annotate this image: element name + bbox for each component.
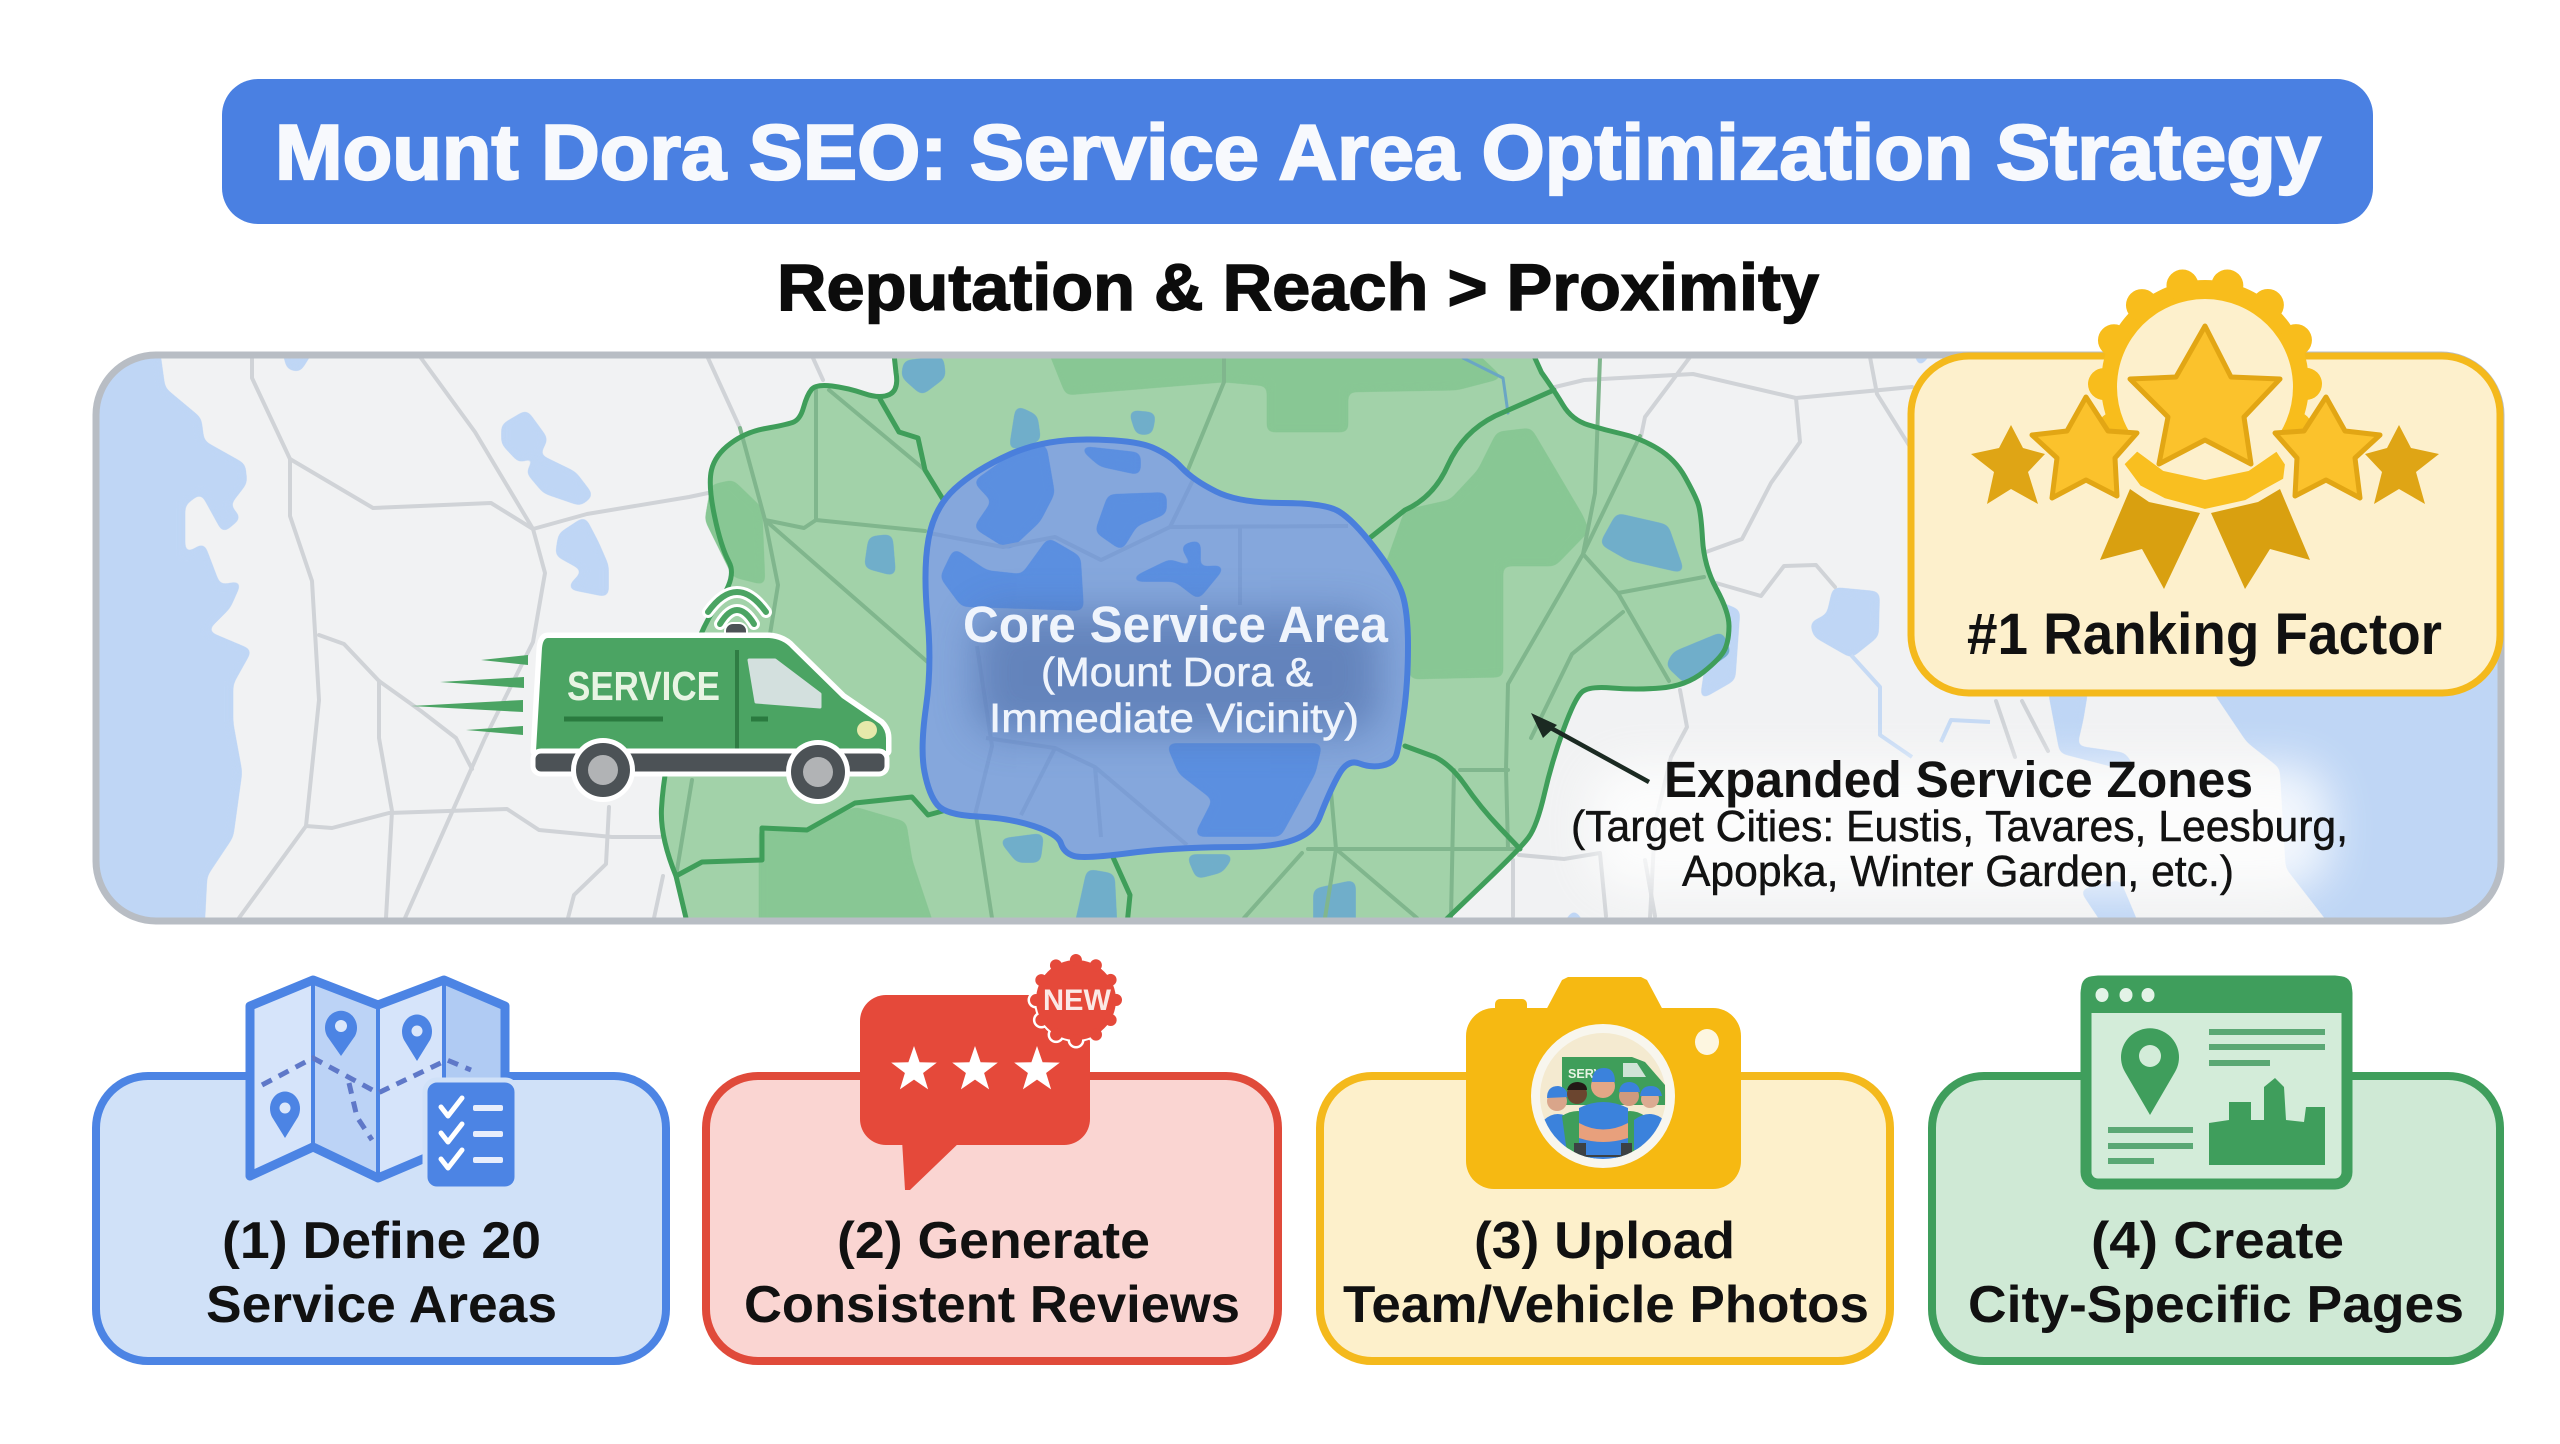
team photo [1544,1057,1665,1160]
green zone lakes [867,359,1728,935]
team members [1544,1068,1664,1160]
title text: Mount Dora SEO: Service Area Optimization Strategy [275,108,2321,196]
map: label halo [1590,765,2330,890]
map: roads [239,357,2048,918]
core area label: Core Service Area [963,596,1389,653]
core area label: (Mount Dora & [1041,649,1313,695]
step 2 label [744,1212,1240,1334]
subtitle: Reputation & Reach > Proximity [777,250,1819,324]
wifi signal [708,592,766,624]
panel: step 1 define service areas [96,980,666,1361]
core roads [929,480,1348,845]
icon: browser window with city page [2081,976,2352,1184]
new badge [1034,958,1118,1042]
step 3 label: Team/Vehicle Photos [1343,1276,1869,1334]
right star [2275,397,2380,498]
map: expanded zones label: Apopka, Winter Garden, etc.) [1682,847,2234,896]
core area label [963,596,1389,741]
icon: review speech bubble [860,958,1118,1190]
far left star [1971,425,2045,504]
van label: SERVICE [567,663,720,709]
left star [2032,397,2137,498]
map: expanded zones label: (Target Cities: Eustis, Tavares, Leesburg, [1571,802,2348,851]
map: core service area [923,439,1408,857]
ribbon tails [2100,489,2200,589]
core lakes [943,447,1319,834]
van bumper [533,751,887,774]
step 2 label: Consistent Reviews [744,1276,1240,1334]
ribbon arc [2122,449,2287,511]
darker green land [705,345,1589,935]
speed lines [411,655,528,735]
new badge: NEW [1043,984,1112,1017]
title banner [222,79,2373,224]
van window [749,660,820,707]
green zone boundaries [661,345,1729,935]
far right star [2365,425,2439,504]
photo van [1562,1057,1665,1105]
map: arrow to expanded zones [1531,713,1649,782]
panel: step 3 upload photos [1320,977,1890,1361]
panel: service area map [80,345,2520,935]
step 3 label [1343,1212,1869,1334]
step 1 label: Service Areas [206,1276,557,1334]
green zone roads [676,358,1704,918]
map: expanded zones label [1571,751,2348,896]
core label shade [975,612,1380,734]
map: coastal water [80,345,2520,935]
panel: #1 ranking factor [1911,280,2500,693]
checklist [425,1080,517,1189]
centre star [2130,326,2280,464]
text lines [2108,1029,2325,1164]
van body [536,638,886,751]
location pin [2121,1028,2179,1115]
map pins [270,1011,432,1138]
dashed routes [262,1058,471,1140]
step 4 label [1968,1212,2464,1334]
step 4 label: City-Specific Pages [1968,1276,2464,1334]
map: expanded service zones [661,345,1729,935]
team photo: SERV [1568,1066,1602,1081]
panel: step 4 city-specific pages [1932,976,2500,1361]
panel: step 2 generate reviews [706,958,1278,1361]
icon: rosette with stars [1971,280,2439,589]
icon: folded map with checklist [250,980,517,1189]
icon: camera with team photo [1466,977,1741,1189]
map: expanded zones label: Expanded Service Zones [1664,751,2253,808]
step 4 label: (4) Create [2091,1212,2344,1270]
van wheels [571,738,635,802]
map: rivers [1851,655,1990,757]
icon: service van [411,592,887,804]
city skyline [2209,1078,2325,1165]
step 2 label: (2) Generate [837,1212,1150,1270]
ranking label: #1 Ranking Factor [1967,602,2442,667]
review stars [891,1046,1060,1089]
step 3 label: (3) Upload [1474,1212,1735,1270]
step 1 label: (1) Define 20 [222,1212,541,1270]
core area label: Immediate Vicinity) [989,695,1359,741]
step 1 label [206,1212,557,1334]
